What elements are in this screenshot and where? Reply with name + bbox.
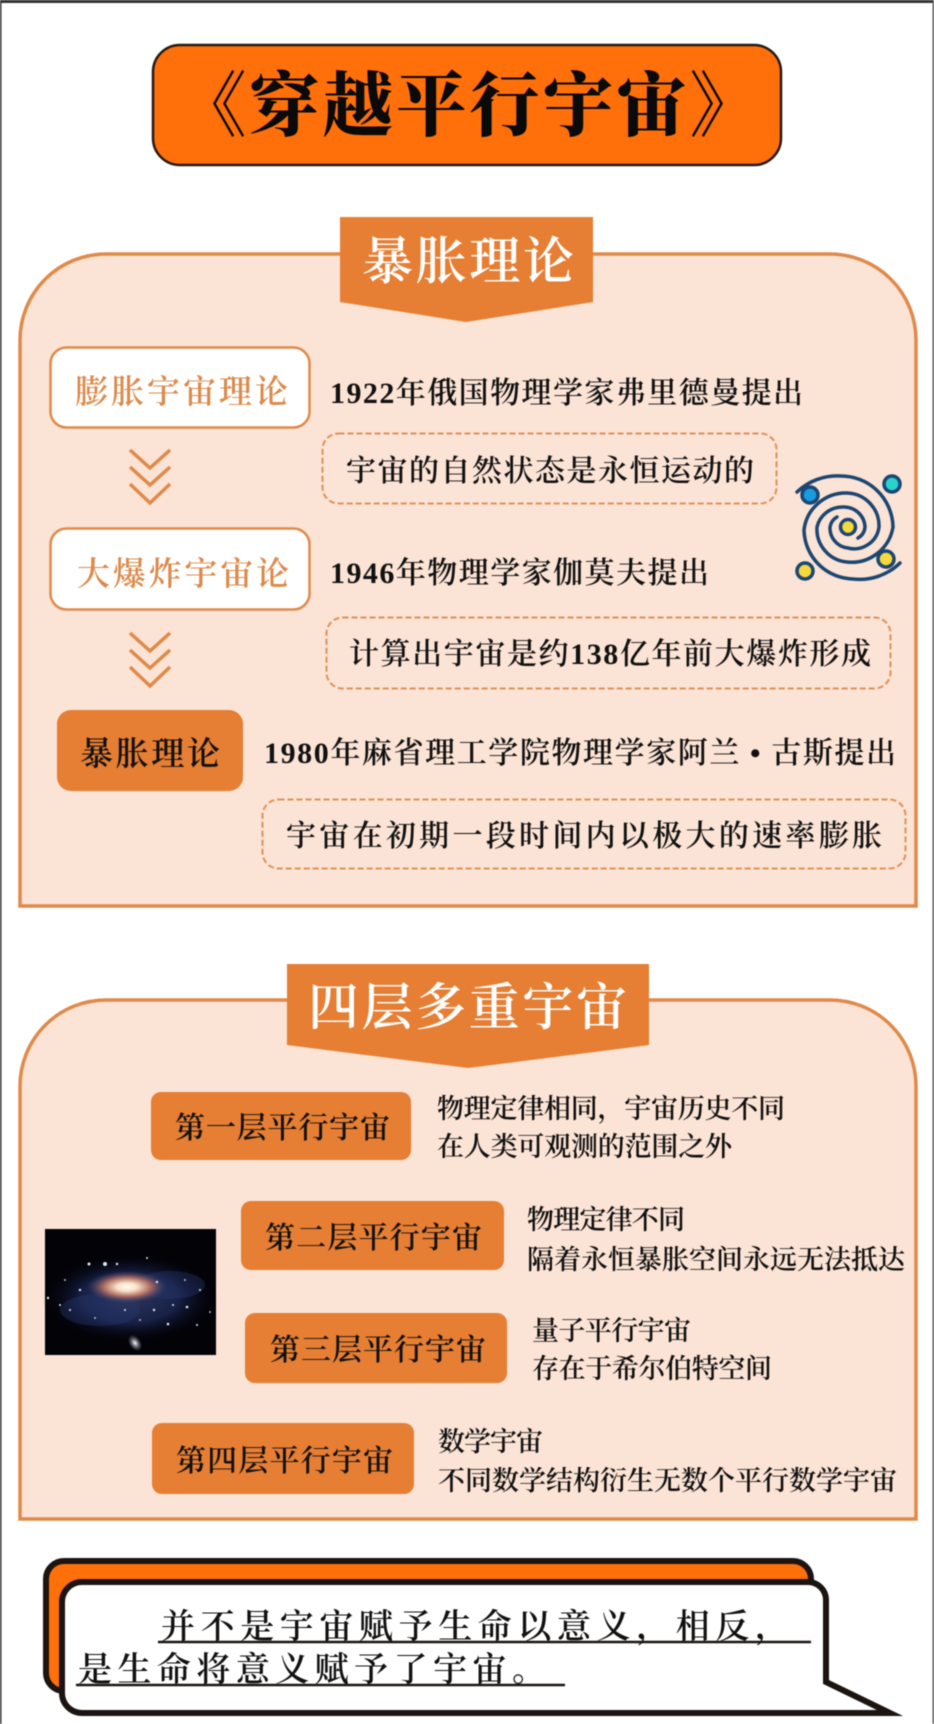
level 1 label xyxy=(151,1092,411,1160)
arrow: chevrons down 2 xyxy=(130,633,170,686)
callout: 13.8 billion years: 计算出宇宙是约138亿年前大爆炸形成 xyxy=(349,638,871,671)
level 4 label: 第四层平行宇宙 xyxy=(176,1445,393,1478)
node: big bang theory: 大爆炸宇宙论 xyxy=(77,556,289,593)
node: big bang theory xyxy=(50,528,310,610)
text: 1946 proposer: 1946年物理学家伽莫夫提出 xyxy=(330,557,709,590)
level 1 description xyxy=(437,1094,785,1162)
level 4 description: 数学宇宙 xyxy=(438,1427,543,1457)
level 1 description: 在人类可观测的范围之外 xyxy=(437,1132,734,1162)
heading: four-level multiverse xyxy=(287,964,649,1068)
panel: inflation theory xyxy=(20,217,916,906)
callout: eternal motion xyxy=(322,434,776,504)
arrow: chevrons down 1 xyxy=(130,450,170,503)
level 4 label xyxy=(152,1423,414,1494)
text: 1922 proposer: 1922年俄国物理学家弗里德曼提出 xyxy=(330,377,803,410)
node: expanding universe theory: 膨胀宇宙理论 xyxy=(75,374,288,411)
closing quote speech bubble xyxy=(46,1561,890,1713)
level 3 description: 存在于希尔伯特空间 xyxy=(532,1354,772,1384)
heading: inflation theory: 暴胀理论 xyxy=(362,235,574,291)
level 2 label xyxy=(241,1201,504,1270)
level 2 description: 物理定律不同 xyxy=(527,1205,685,1235)
node: inflation theory: 暴胀理论 xyxy=(80,736,220,773)
quote text: 是生命将意义赋予了宇宙。 xyxy=(78,1651,546,1689)
level 2 label: 第二层平行宇宙 xyxy=(265,1222,482,1255)
callout: rapid expansion: 宇宙在初期一段时间内以极大的速率膨胀 xyxy=(286,820,882,853)
text: 1980 proposer: 1980年麻省理工学院物理学家阿兰 • 古斯提出 xyxy=(264,737,896,770)
level 4 description xyxy=(438,1427,897,1496)
level 1 label: 第一层平行宇宙 xyxy=(175,1112,390,1145)
quote text: 并不是宇宙赋予生命以意义，相反， xyxy=(161,1608,789,1646)
bubble back layer xyxy=(46,1561,811,1691)
level 3 description: 量子平行宇宙 xyxy=(532,1316,691,1346)
level 3 label xyxy=(245,1313,507,1383)
panel: four-level multiverse xyxy=(20,964,916,1519)
quote text xyxy=(78,1608,789,1689)
level 3 label: 第三层平行宇宙 xyxy=(270,1334,486,1367)
icon: spiral galaxy xyxy=(797,476,900,579)
node: inflation theory xyxy=(57,710,243,791)
level 3 description xyxy=(532,1316,772,1384)
underlines xyxy=(76,1642,811,1685)
heading: inflation theory xyxy=(340,217,593,322)
node: expanding universe theory xyxy=(50,348,310,428)
callout: 13.8 billion years xyxy=(326,618,890,688)
galaxy photo xyxy=(42,1229,218,1355)
callout: eternal motion: 宇宙的自然状态是永恒运动的 xyxy=(346,455,754,488)
title banner: 《穿越平行宇宙》 xyxy=(176,67,760,146)
title banner xyxy=(153,45,781,165)
level 2 description xyxy=(527,1205,906,1275)
heading: four-level multiverse: 四层多重宇宙 xyxy=(308,981,627,1037)
level 1 description: 物理定律相同，宇宙历史不同 xyxy=(437,1094,785,1124)
bubble front layer xyxy=(62,1582,890,1713)
level 4 description: 不同数学结构衍生无数个平行数学宇宙 xyxy=(438,1466,897,1496)
callout: rapid expansion xyxy=(262,800,906,868)
level 2 description: 隔着永恒暴胀空间永远无法抵达 xyxy=(527,1245,906,1275)
